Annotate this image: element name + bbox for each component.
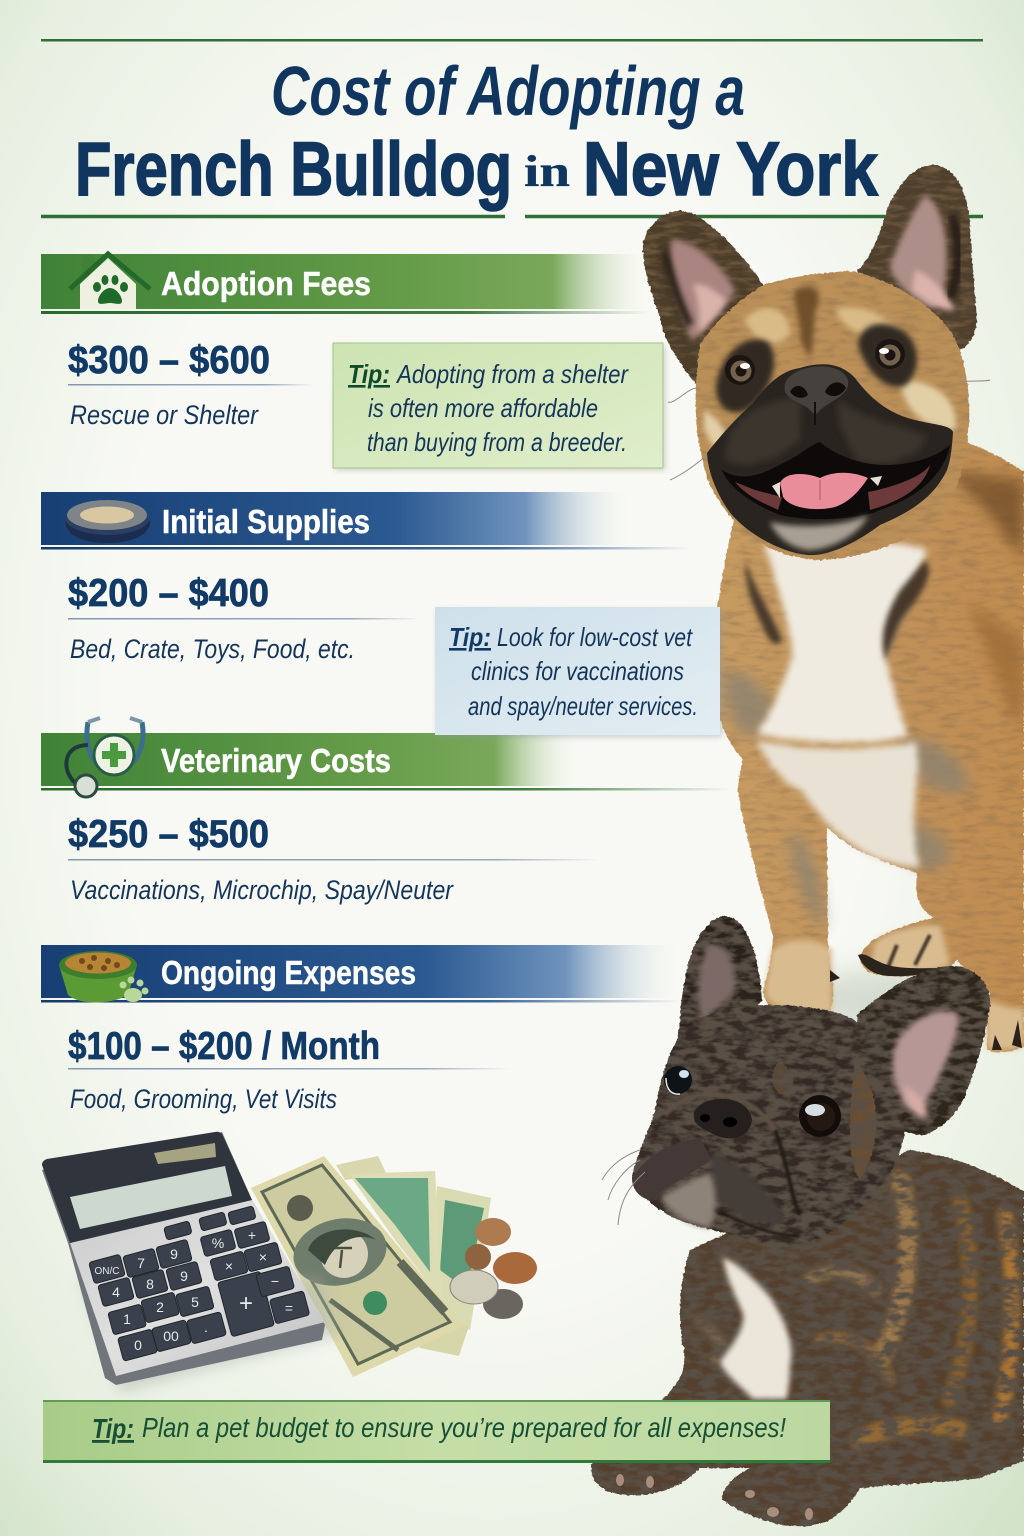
key labels: + [248,1227,256,1243]
back bills [336,1156,387,1180]
left ear [677,916,762,1040]
seals [287,1195,313,1221]
forehead markings [794,287,819,358]
section: veterinary costs [41,718,731,905]
display [70,1166,232,1229]
muzzle wrinkles [665,1094,800,1236]
description: Bed, Crate, Toys, Food, etc. [70,634,355,664]
key labels: 2 [156,1299,164,1315]
icon: food bowl [59,951,148,1002]
floor shadow [785,970,1024,1030]
key labels: + [239,1290,253,1317]
tip: low-cost vet clinics: Look for low-cost vet [497,622,693,652]
lower belly [757,740,920,868]
tip: low-cost vet clinics: Tip: [449,622,491,652]
description: Rescue or Shelter [70,400,259,430]
paw highlights [765,925,1024,1050]
title line two: New York [583,127,879,212]
title line two: in [524,147,570,196]
cash and coins [251,1156,537,1377]
jowl [712,1152,785,1223]
claws [830,970,1022,1050]
tongue [780,473,868,509]
paw toes [616,1474,813,1520]
tip banner: pet budget: Tip: [92,1413,134,1444]
price: $100 – $200 / Month [68,1025,380,1068]
left ear [643,211,763,388]
tip: low-cost vet clinics [435,607,722,737]
foot details [887,935,930,970]
nose [785,366,848,425]
header bar green [41,733,581,786]
header text: Initial Supplies [162,503,370,540]
portrait [287,1210,393,1294]
tip banner: pet budget [43,1400,830,1463]
right ear [857,165,977,350]
section: adoption fees [41,254,651,430]
key labels: 00 [163,1328,179,1344]
title line two: French Bulldog [75,127,512,212]
key labels: 0 [134,1337,142,1353]
key labels: 7 [137,1255,145,1271]
tip: low-cost vet clinics: and spay/neuter services. [468,691,698,721]
key labels: − [271,1273,279,1289]
photo: adult fawn french bulldog [643,165,1024,1052]
keys [89,1206,310,1361]
description: Vaccinations, Microchip, Spay/Neuter [70,875,454,905]
chin [660,1172,716,1228]
header bar blue [41,945,681,998]
tip: shelter adoption: than buying from a breeder. [367,427,627,457]
price: $300 – $600 [68,339,270,382]
whiskers [602,1150,645,1225]
brindle shading [940,470,1024,730]
key labels: 4 [112,1284,120,1300]
body [712,440,1024,1052]
section: initial supplies [41,492,691,664]
body [591,1150,1024,1526]
key labels: ON/C [94,1266,120,1277]
icon: stethoscope [66,718,143,797]
description: Food, Grooming, Vet Visits [70,1084,337,1114]
tip: shelter adoption: is often more affordable [368,393,598,423]
tip: shelter adoption: Adopting from a shelter [395,359,629,389]
title block [41,39,983,216]
key labels: 1 [123,1311,131,1327]
tip: shelter adoption: Tip: [348,359,390,389]
muzzle fold [632,1138,712,1200]
eye masks [716,339,774,413]
header text: Ongoing Expenses [161,954,416,991]
title line one: Cost of Adopting a [271,52,745,130]
key labels: 9 [170,1246,178,1262]
key labels: = [285,1300,293,1316]
tip: shelter adoption [333,343,665,470]
icon: house with paw [70,254,150,309]
mouth interior [722,442,950,519]
eyes [664,1066,841,1137]
coins [450,1218,537,1319]
calculator body [42,1132,325,1385]
header text: Veterinary Costs [161,742,391,779]
head [668,272,990,560]
dark chest stripes [745,560,929,660]
tip: low-cost vet clinics: clinics for vaccinations [471,656,684,686]
price: $200 – $400 [68,572,269,615]
key labels: × [225,1258,233,1274]
black muzzle [707,364,953,555]
key labels: × [259,1249,267,1265]
key labels: 5 [191,1294,199,1310]
price: $250 – $500 [68,813,269,856]
dark top plate [42,1132,252,1243]
calculator [42,1132,340,1392]
key labels: . [204,1319,208,1335]
key labels [94,1227,293,1353]
white chest [757,538,927,743]
header text: Adoption Fees [161,265,371,302]
key labels: % [212,1235,224,1251]
solar panel [154,1143,216,1164]
chin [770,515,868,550]
header bar green [41,254,650,309]
key labels: 9 [180,1268,188,1284]
head [602,1005,905,1245]
icon: dog bed [64,500,150,543]
section: ongoing expenses [41,945,681,1114]
main bill [251,1156,464,1377]
white chest mark [720,1257,791,1399]
title line two [75,127,879,212]
tip banner: pet budget: Plan a pet budget to ensure you’re prepared for all expenses! [142,1412,786,1443]
whiskers [668,380,990,480]
eyes [725,339,905,385]
grey fur patches [724,670,970,930]
nose [694,1099,752,1138]
key labels: 8 [146,1276,154,1292]
header bar blue [41,492,631,545]
photo: brindle french bulldog puppy [591,916,1024,1526]
right ear [857,966,990,1135]
